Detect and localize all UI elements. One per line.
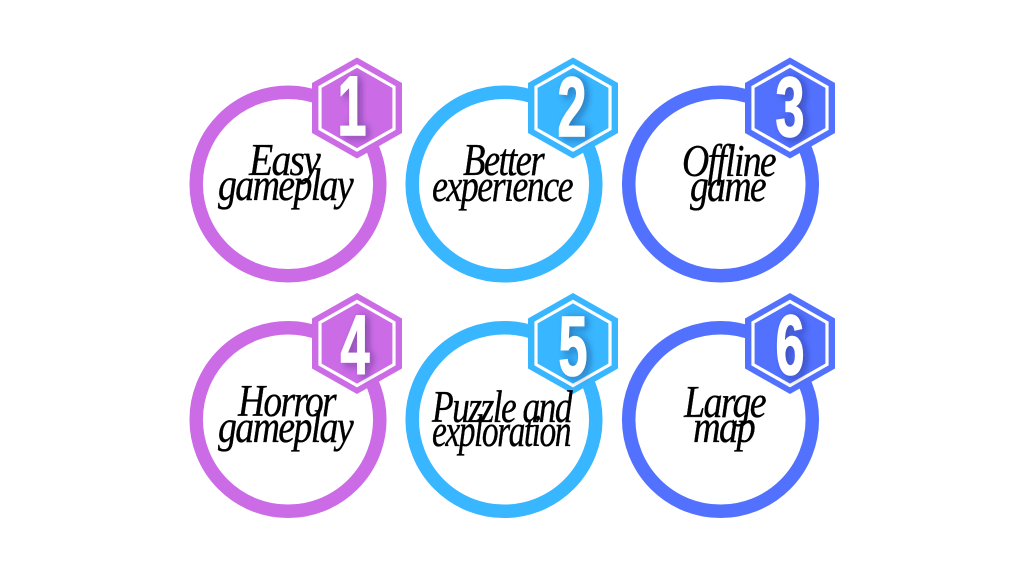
item 5: puzzle and exploration xyxy=(412,293,618,511)
item 2: better experience xyxy=(412,58,618,276)
label 6: Large xyxy=(683,377,766,427)
hexagon badge 1 xyxy=(312,58,402,158)
hexagon badge 4 xyxy=(312,293,402,394)
label 4: Horror xyxy=(237,376,337,426)
label 2: experience xyxy=(432,161,573,211)
label 1 xyxy=(218,135,354,210)
ring 2 xyxy=(412,92,596,276)
item 6: large map xyxy=(629,293,835,511)
ring 1 xyxy=(196,92,380,276)
number 3: 3 xyxy=(776,60,804,154)
label 5: Puzzle and xyxy=(431,382,573,432)
ring 6 xyxy=(629,328,812,511)
label 3: Offline xyxy=(682,136,776,186)
number 2: 2 xyxy=(558,60,586,154)
number 5: 5 xyxy=(559,299,587,393)
label 3: game xyxy=(690,161,766,211)
number 6: 6 xyxy=(776,298,804,392)
label 1: Easy xyxy=(248,135,321,185)
item 3: offline game xyxy=(629,58,835,276)
ring 4 xyxy=(196,328,380,511)
label 4: gameplay xyxy=(218,402,354,452)
number 1: 1 xyxy=(338,59,366,153)
label 2: Better xyxy=(463,135,545,185)
item 1: easy gameplay xyxy=(196,58,402,276)
item 4: horror gameplay xyxy=(196,293,402,511)
label 6: map xyxy=(693,402,755,452)
ring 5 xyxy=(412,328,596,511)
label 2 xyxy=(432,135,573,211)
hexagon badge 6 xyxy=(745,293,835,394)
label 5: exploration xyxy=(432,406,570,456)
hexagon badge 2 xyxy=(528,58,618,158)
label 5 xyxy=(431,382,573,456)
label 1: gameplay xyxy=(218,160,354,210)
hexagon badge 5 xyxy=(528,293,618,394)
hexagon badge 3 xyxy=(745,58,835,158)
ring 3 xyxy=(629,92,812,276)
label 6 xyxy=(683,377,766,452)
number 4: 4 xyxy=(341,298,370,392)
label 4 xyxy=(218,376,354,452)
label 3 xyxy=(682,136,776,211)
